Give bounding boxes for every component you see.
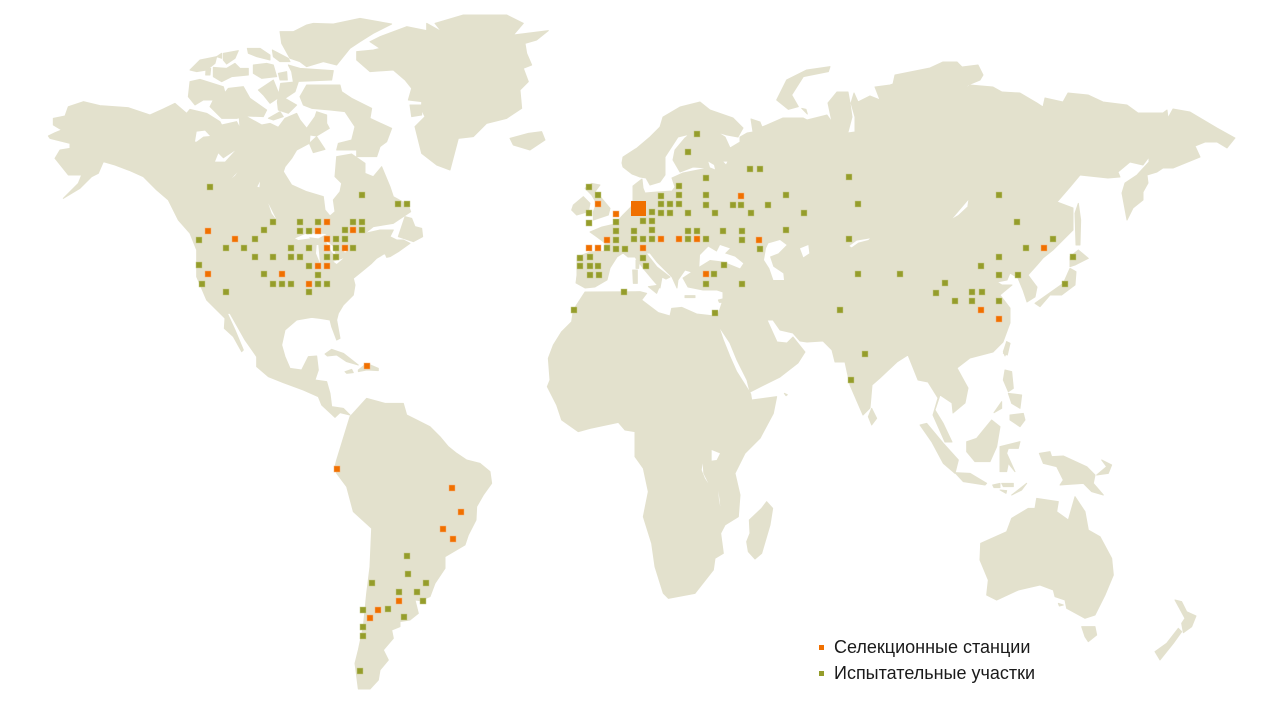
European and Arctic islands bbox=[572, 183, 725, 302]
Eurasia bbox=[576, 62, 1235, 442]
marker: headquarters large orange square bbox=[631, 201, 646, 216]
markers: Europe, Russia and Middle East bbox=[571, 131, 807, 316]
North America mainland and arctic islands with Greenland bbox=[48, 15, 548, 417]
South East Asia islands bbox=[868, 342, 1112, 495]
markers: South America bbox=[334, 466, 464, 674]
Africa and Madagascar bbox=[547, 292, 787, 598]
Caribbean islands bbox=[325, 349, 378, 373]
inland seas and lakes of Eurasia bbox=[699, 162, 968, 280]
Australia, Tasmania and New Zealand bbox=[980, 497, 1196, 660]
legend item: breeding stations: Селекционные станции bbox=[834, 637, 1030, 657]
South America bbox=[335, 398, 492, 689]
Novaya Zemlya bbox=[777, 67, 830, 114]
legend bbox=[819, 637, 1035, 683]
markers: Asia bbox=[837, 174, 1076, 383]
Iceland bbox=[510, 132, 545, 150]
legend item: test sites: Испытательные участки bbox=[834, 663, 1035, 683]
Japan, Sakhalin and Taiwan bbox=[1003, 203, 1088, 356]
markers: North America bbox=[196, 184, 410, 369]
